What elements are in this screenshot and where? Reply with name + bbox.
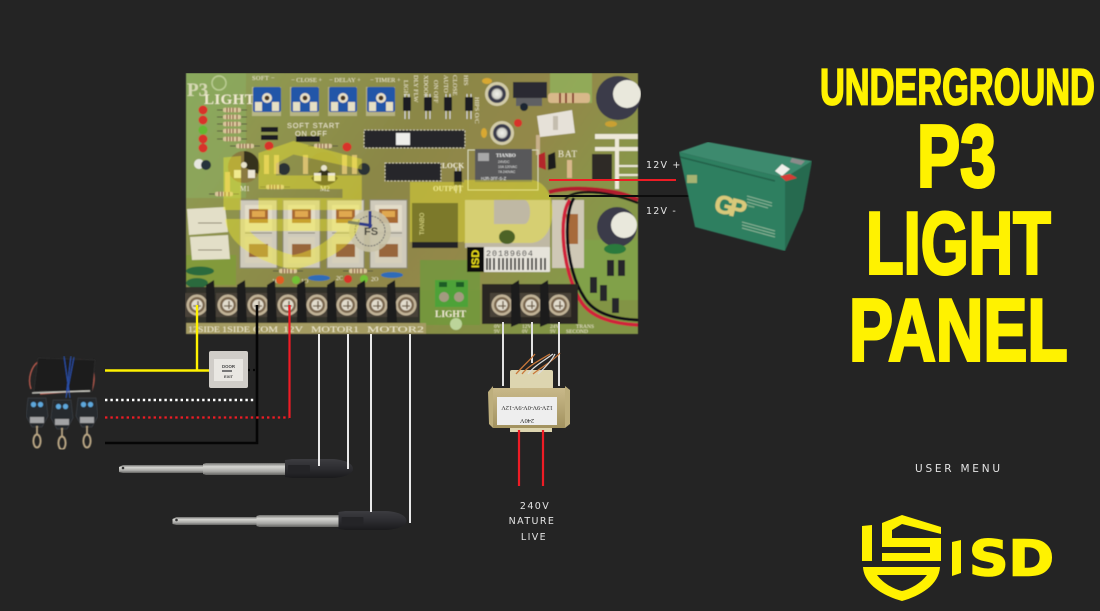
wiring: red dotted wire — [105, 416, 289, 419]
board silk text: OUTPUT — [433, 185, 463, 193]
transformer screw terminal: SECOND — [566, 329, 588, 335]
battery wires external — [549, 180, 692, 196]
board silk text: LIGHT — [204, 92, 255, 108]
motor potentiometers M1 and M2 — [225, 151, 370, 192]
board silk text: − CLOSE + — [291, 77, 323, 84]
label: 240V nature live — [509, 501, 555, 543]
user menu label: USER MENU — [915, 463, 1000, 475]
round FS inspection sticker: FS — [364, 226, 378, 238]
board silk text: LOCK — [442, 161, 464, 170]
logo bar I — [952, 540, 961, 576]
transformer screw terminal: 0V — [494, 324, 501, 330]
motor actuator 2 — [172, 511, 406, 530]
TIANBO relay: 10A 120VAC — [498, 165, 518, 169]
board silk text: ON OFF — [295, 129, 328, 138]
board silk text: CLOSE — [451, 75, 458, 96]
title: UNDERGROUND — [820, 60, 1095, 116]
serial sticker 20189604 — [467, 247, 550, 272]
wiring: red mains wires — [519, 430, 543, 486]
serial sticker 20189604: ISD — [470, 250, 482, 268]
transformer screw terminal: 24V — [550, 324, 560, 330]
transformer screw terminal: 9V — [550, 330, 556, 335]
door exit button: EXIT — [224, 374, 234, 379]
wiring: black dotted button wire — [243, 369, 257, 371]
board silk text: HIS — [462, 75, 469, 86]
integrated circuits — [364, 130, 465, 181]
transformer screw terminal — [482, 280, 594, 335]
motor actuator 1 — [119, 459, 353, 478]
green LIGHT terminal — [435, 280, 468, 330]
door exit button — [209, 351, 248, 388]
board silk text: M1 — [240, 185, 250, 193]
board silk text: LIGHT — [402, 80, 409, 100]
board colour patches — [186, 73, 638, 334]
transformer screw terminal: TRANS — [576, 324, 594, 330]
title: P3 — [917, 108, 996, 206]
terminal labels: MOTOR2 — [367, 324, 424, 334]
label: 240V nature live: 240V — [520, 501, 550, 512]
board silk text: − TIMER + — [370, 77, 401, 84]
relay bank: TIANBO — [420, 212, 426, 235]
round FS inspection sticker — [348, 210, 391, 252]
translucent ISD watermark — [224, 141, 552, 270]
label: 12V -: 12V - — [646, 206, 677, 217]
dark dot on relay cover — [499, 230, 515, 244]
icon: shield — [862, 515, 941, 601]
relay bank — [240, 200, 584, 268]
panel: P3 control board photo — [185, 73, 641, 335]
wiring: white dotted wire — [105, 399, 255, 401]
status LEDs and resistors — [194, 106, 352, 196]
wiring: yellow push button wire — [105, 305, 215, 370]
wiring: black common wire — [105, 305, 257, 443]
terminal labels: MOTOR1 — [311, 324, 359, 334]
wiring: transformer secondary wires — [503, 322, 559, 386]
board silk text: DLY FLW — [412, 75, 419, 103]
board silk text: BAT — [558, 149, 578, 159]
title: PANEL — [849, 282, 1068, 380]
board silk text: SOFT START — [287, 121, 340, 130]
battery: Power — [746, 203, 755, 209]
TIANBO relay: 7A 240VAC — [498, 170, 516, 174]
capacitors and power components — [481, 76, 641, 313]
motor wire ends over actuator — [319, 455, 371, 512]
serial sticker 20189604: 20189604 — [486, 250, 534, 259]
title — [820, 60, 1095, 380]
board silk text: 1O — [301, 279, 309, 285]
board silk text: − DELAY + — [329, 77, 361, 84]
label: 240V nature live: LIVE — [521, 532, 547, 543]
title: LIGHT — [866, 195, 1051, 293]
battery: GP — [712, 190, 749, 225]
TIANBO relay: 24VDC — [498, 160, 510, 164]
board silk text: 2O — [371, 277, 379, 283]
transformer — [488, 353, 570, 432]
TIANBO relay: TIANBO — [496, 154, 516, 159]
battery wires on board — [549, 189, 638, 325]
board silk text: P3 — [187, 80, 208, 101]
board silk text: XDOOR — [422, 75, 429, 99]
label: 240V nature live: NATURE — [509, 516, 555, 527]
terminal labels: COM — [253, 324, 278, 334]
wiring: red 12V wire — [288, 305, 291, 418]
board silk text: 2C — [336, 276, 343, 282]
TIANBO relay: HJR-3FF-S-Z — [481, 176, 507, 181]
board silk text: 1C — [272, 279, 279, 285]
bottom screw terminal block — [185, 280, 420, 327]
transformer: 12V-9V-0V-9V-12V — [501, 404, 553, 411]
board silk text — [187, 75, 578, 320]
power resistors — [186, 207, 403, 288]
ISD logo — [862, 515, 1054, 601]
logo wordmark: SD — [969, 530, 1054, 588]
receiver with remotes — [26, 356, 98, 450]
terminal labels: 1SIDE — [222, 324, 250, 334]
transformer screw terminal: 0V — [522, 330, 528, 335]
jumpers — [403, 94, 473, 193]
board silk text: AUTO — [442, 75, 449, 93]
board silk text: M2 — [320, 185, 330, 193]
board silk text: HIPS O/C — [473, 97, 480, 124]
label: 12V +: 12V + — [646, 160, 682, 171]
board silk text: SOFT − — [252, 75, 275, 82]
transformer screw terminal: 9V — [494, 330, 500, 335]
door exit button: DOOR — [222, 364, 236, 369]
transformer screw terminal: 12V — [522, 324, 532, 330]
terminal labels: 12V — [283, 324, 304, 334]
TIANBO relay — [468, 149, 538, 190]
board silk text: LIGHT — [435, 310, 467, 320]
terminal labels: 12SIDE — [188, 324, 220, 334]
board silk text: ON OFF — [432, 80, 439, 103]
terminal labels — [186, 323, 426, 334]
transformer: 240V — [520, 417, 534, 424]
wiring: motor wires — [319, 334, 410, 523]
battery — [679, 142, 812, 251]
blue trimmer potentiometers — [252, 87, 395, 116]
